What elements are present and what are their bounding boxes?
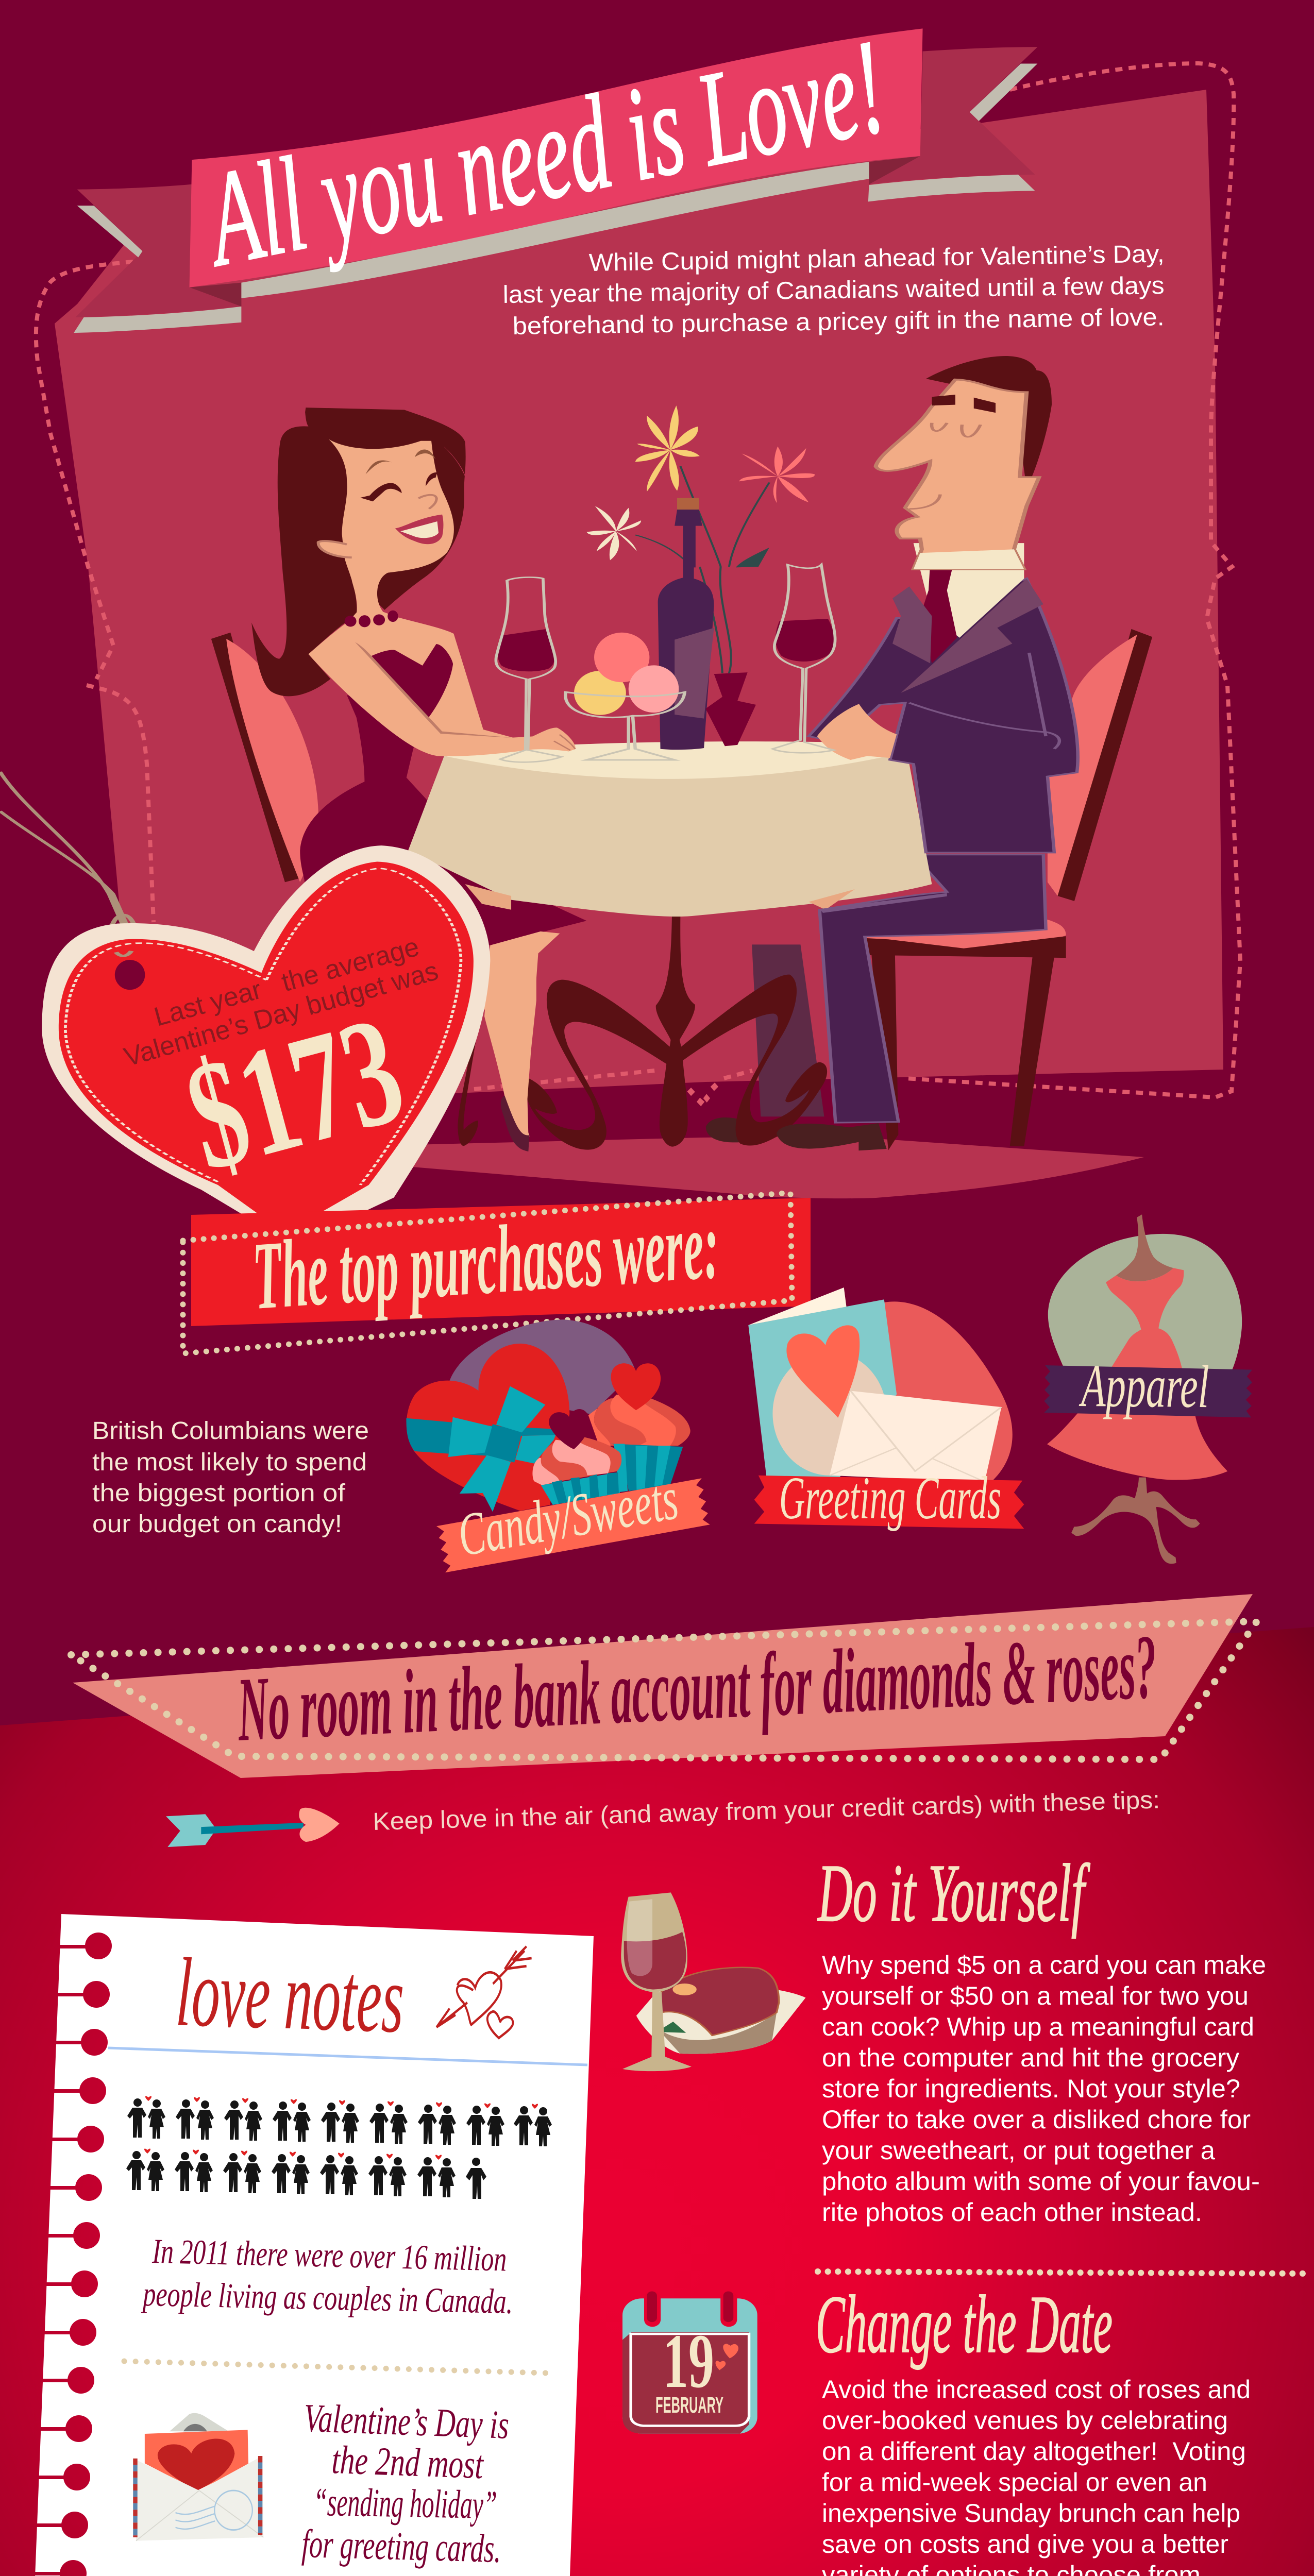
table leg <box>527 902 827 1150</box>
man's back leg <box>752 944 824 1116</box>
body: your sweetheart, or put together a <box>822 2136 1215 2165</box>
bottle neck <box>677 498 699 510</box>
heart <box>42 845 490 1245</box>
table <box>408 741 947 917</box>
salmon ribbon <box>73 1594 1253 1778</box>
divider <box>818 2272 1311 2274</box>
tag text: Valentine’s Day budget was <box>121 956 442 1073</box>
dotted frame <box>71 1621 1257 1759</box>
icon: candy and sweets <box>406 1319 710 1572</box>
heading ribbon <box>191 1198 811 1326</box>
jacket lines <box>909 653 1059 749</box>
heading: no room <box>71 1594 1257 1778</box>
icon: wine and steak <box>621 1892 805 2071</box>
hand <box>817 704 897 760</box>
right wine glass <box>776 619 835 662</box>
ear <box>318 541 352 557</box>
left wine glass <box>497 629 554 671</box>
top purchases section: The top purchases were: <box>250 1191 722 1330</box>
title banner <box>74 11 1037 333</box>
jacket <box>808 579 1078 853</box>
woman's shoe <box>484 953 538 1151</box>
floor details and legs <box>458 902 827 1150</box>
icon: greeting cards <box>748 1287 1024 1529</box>
background: top maroon <box>0 0 1314 1752</box>
body: on a different day altogether! Voting <box>822 2437 1246 2466</box>
left chair leg <box>458 1022 479 1146</box>
necklace <box>345 611 398 627</box>
woman lower body <box>300 697 586 1137</box>
BC note <box>92 1417 369 1538</box>
body: Offer to take over a disliked chore for <box>822 2105 1251 2134</box>
vase <box>705 672 756 746</box>
rule <box>108 2048 587 2065</box>
banner ribbon <box>74 28 1037 333</box>
hair <box>251 408 466 696</box>
stat: couples: In 2011 there were over 16 million <box>151 2231 507 2279</box>
arrow and tips intro <box>166 1786 1160 1847</box>
skin <box>308 439 576 756</box>
body <box>822 2375 1251 2576</box>
stat: couples: people living as couples in Canada. <box>141 2274 513 2321</box>
label: apparel: Apparel <box>1079 1352 1209 1420</box>
tips intro text: Keep love in the air (and away from your credit cards) with these tips: <box>373 1786 1160 1836</box>
stat: sending holiday: the 2nd most <box>331 2437 485 2487</box>
BC note: the biggest portion of <box>92 1480 346 1507</box>
wine bottle <box>658 565 714 750</box>
intro text <box>502 240 1165 340</box>
tag text: Last year the average <box>151 932 423 1032</box>
stat: sending holiday: “sending holiday” <box>313 2479 497 2527</box>
dashed outline <box>36 63 1240 1097</box>
stems <box>635 466 769 567</box>
stat: sending holiday: Valentine’s Day is <box>303 2395 510 2447</box>
hero panel <box>36 63 1240 1198</box>
body: Why spend $5 on a card you can make <box>822 1951 1266 1979</box>
label: greeting cards: Greeting Cards <box>779 1464 1001 1532</box>
notepaper: love notes <box>16 1914 594 2576</box>
icon: apparel <box>1044 1214 1252 1564</box>
stems in vase <box>700 567 731 673</box>
stray dashes <box>687 1082 718 1106</box>
man head <box>875 356 1052 569</box>
yellow flower <box>635 405 700 492</box>
intro text: While Cupid might plan ahead for Valentine’s Day, <box>588 240 1165 277</box>
body: rite photos of each other instead. <box>822 2198 1202 2227</box>
ice cream scoops <box>574 671 626 715</box>
panel background <box>55 90 1223 1108</box>
dress top <box>372 644 453 719</box>
tag amount: $173 <box>171 983 419 1203</box>
icon: calendar <box>622 2291 757 2434</box>
woman <box>251 408 576 773</box>
tie <box>920 563 957 663</box>
mouth <box>395 515 443 544</box>
icon: envelope <box>133 2413 263 2541</box>
brows and eyes <box>365 449 435 474</box>
paper sheet <box>21 1914 594 2576</box>
body: can cook? Whip up a meaningful card <box>822 2012 1254 2041</box>
body: on the computer and hit the grocery <box>822 2043 1239 2072</box>
body: for a mid-week special or even an <box>822 2468 1207 2497</box>
body: yourself or $50 on a meal for two you <box>822 1981 1249 2010</box>
price tag <box>0 772 490 1245</box>
top purchases section <box>92 1191 1252 1572</box>
tip: do it yourself <box>621 1847 1266 2227</box>
background: lower red gradient <box>0 1627 1314 2576</box>
body: inexpensive Sunday brunch can help <box>822 2499 1240 2528</box>
calendar date: 19 <box>663 2318 714 2404</box>
intro text: last year the majority of Canadians waited until a few days <box>502 272 1165 309</box>
BC note: our budget on candy! <box>92 1511 342 1538</box>
stat: sending holiday <box>301 2395 510 2571</box>
body: photo album with some of your favou- <box>822 2167 1260 2196</box>
right chair <box>865 629 1152 1150</box>
label: candy: Candy/Sweets <box>453 1464 683 1569</box>
tag string <box>0 772 136 956</box>
love notes title: love notes <box>175 1938 406 2054</box>
lapels <box>892 579 1043 693</box>
pink flower <box>739 446 815 503</box>
flowers and bottle top <box>586 405 815 567</box>
tip: change the date <box>622 2278 1251 2576</box>
body <box>822 1951 1266 2227</box>
man trousers <box>820 855 1046 1123</box>
man's right shoe <box>777 1123 887 1150</box>
left chair <box>211 633 318 882</box>
pictogram: couples <box>126 2096 552 2199</box>
spiral holes <box>16 1933 112 2576</box>
icon: hearts with arrow <box>436 1946 532 2038</box>
dotted frame <box>183 1193 792 1353</box>
icon: arrow with heart <box>166 1808 340 1847</box>
calendar month: FEBRUARY <box>655 2393 723 2418</box>
sundae glass <box>565 692 685 760</box>
stat: sending holiday: for greeting cards. <box>301 2521 502 2571</box>
BC note: the most likely to spend <box>92 1449 367 1476</box>
divider <box>124 2361 546 2373</box>
body: save on costs and give you a better <box>822 2530 1228 2558</box>
body: store for ingredients. Not your style? <box>822 2074 1240 2103</box>
man's left shoe <box>706 1117 744 1142</box>
heading: Do it Yourself <box>817 1847 1090 1939</box>
tabletop objects <box>496 565 835 762</box>
body: Avoid the increased cost of roses and <box>822 2375 1251 2404</box>
cream flower <box>586 506 641 560</box>
shirt <box>914 543 1024 638</box>
intro text: beforehand to purchase a pricey gift in the name of love. <box>512 303 1165 340</box>
BC note: British Columbians were <box>92 1417 369 1445</box>
body: over-booked venues by celebrating <box>822 2406 1228 2435</box>
stat: couples <box>141 2231 513 2321</box>
floor shadow <box>412 1136 1144 1198</box>
man <box>808 543 1078 853</box>
